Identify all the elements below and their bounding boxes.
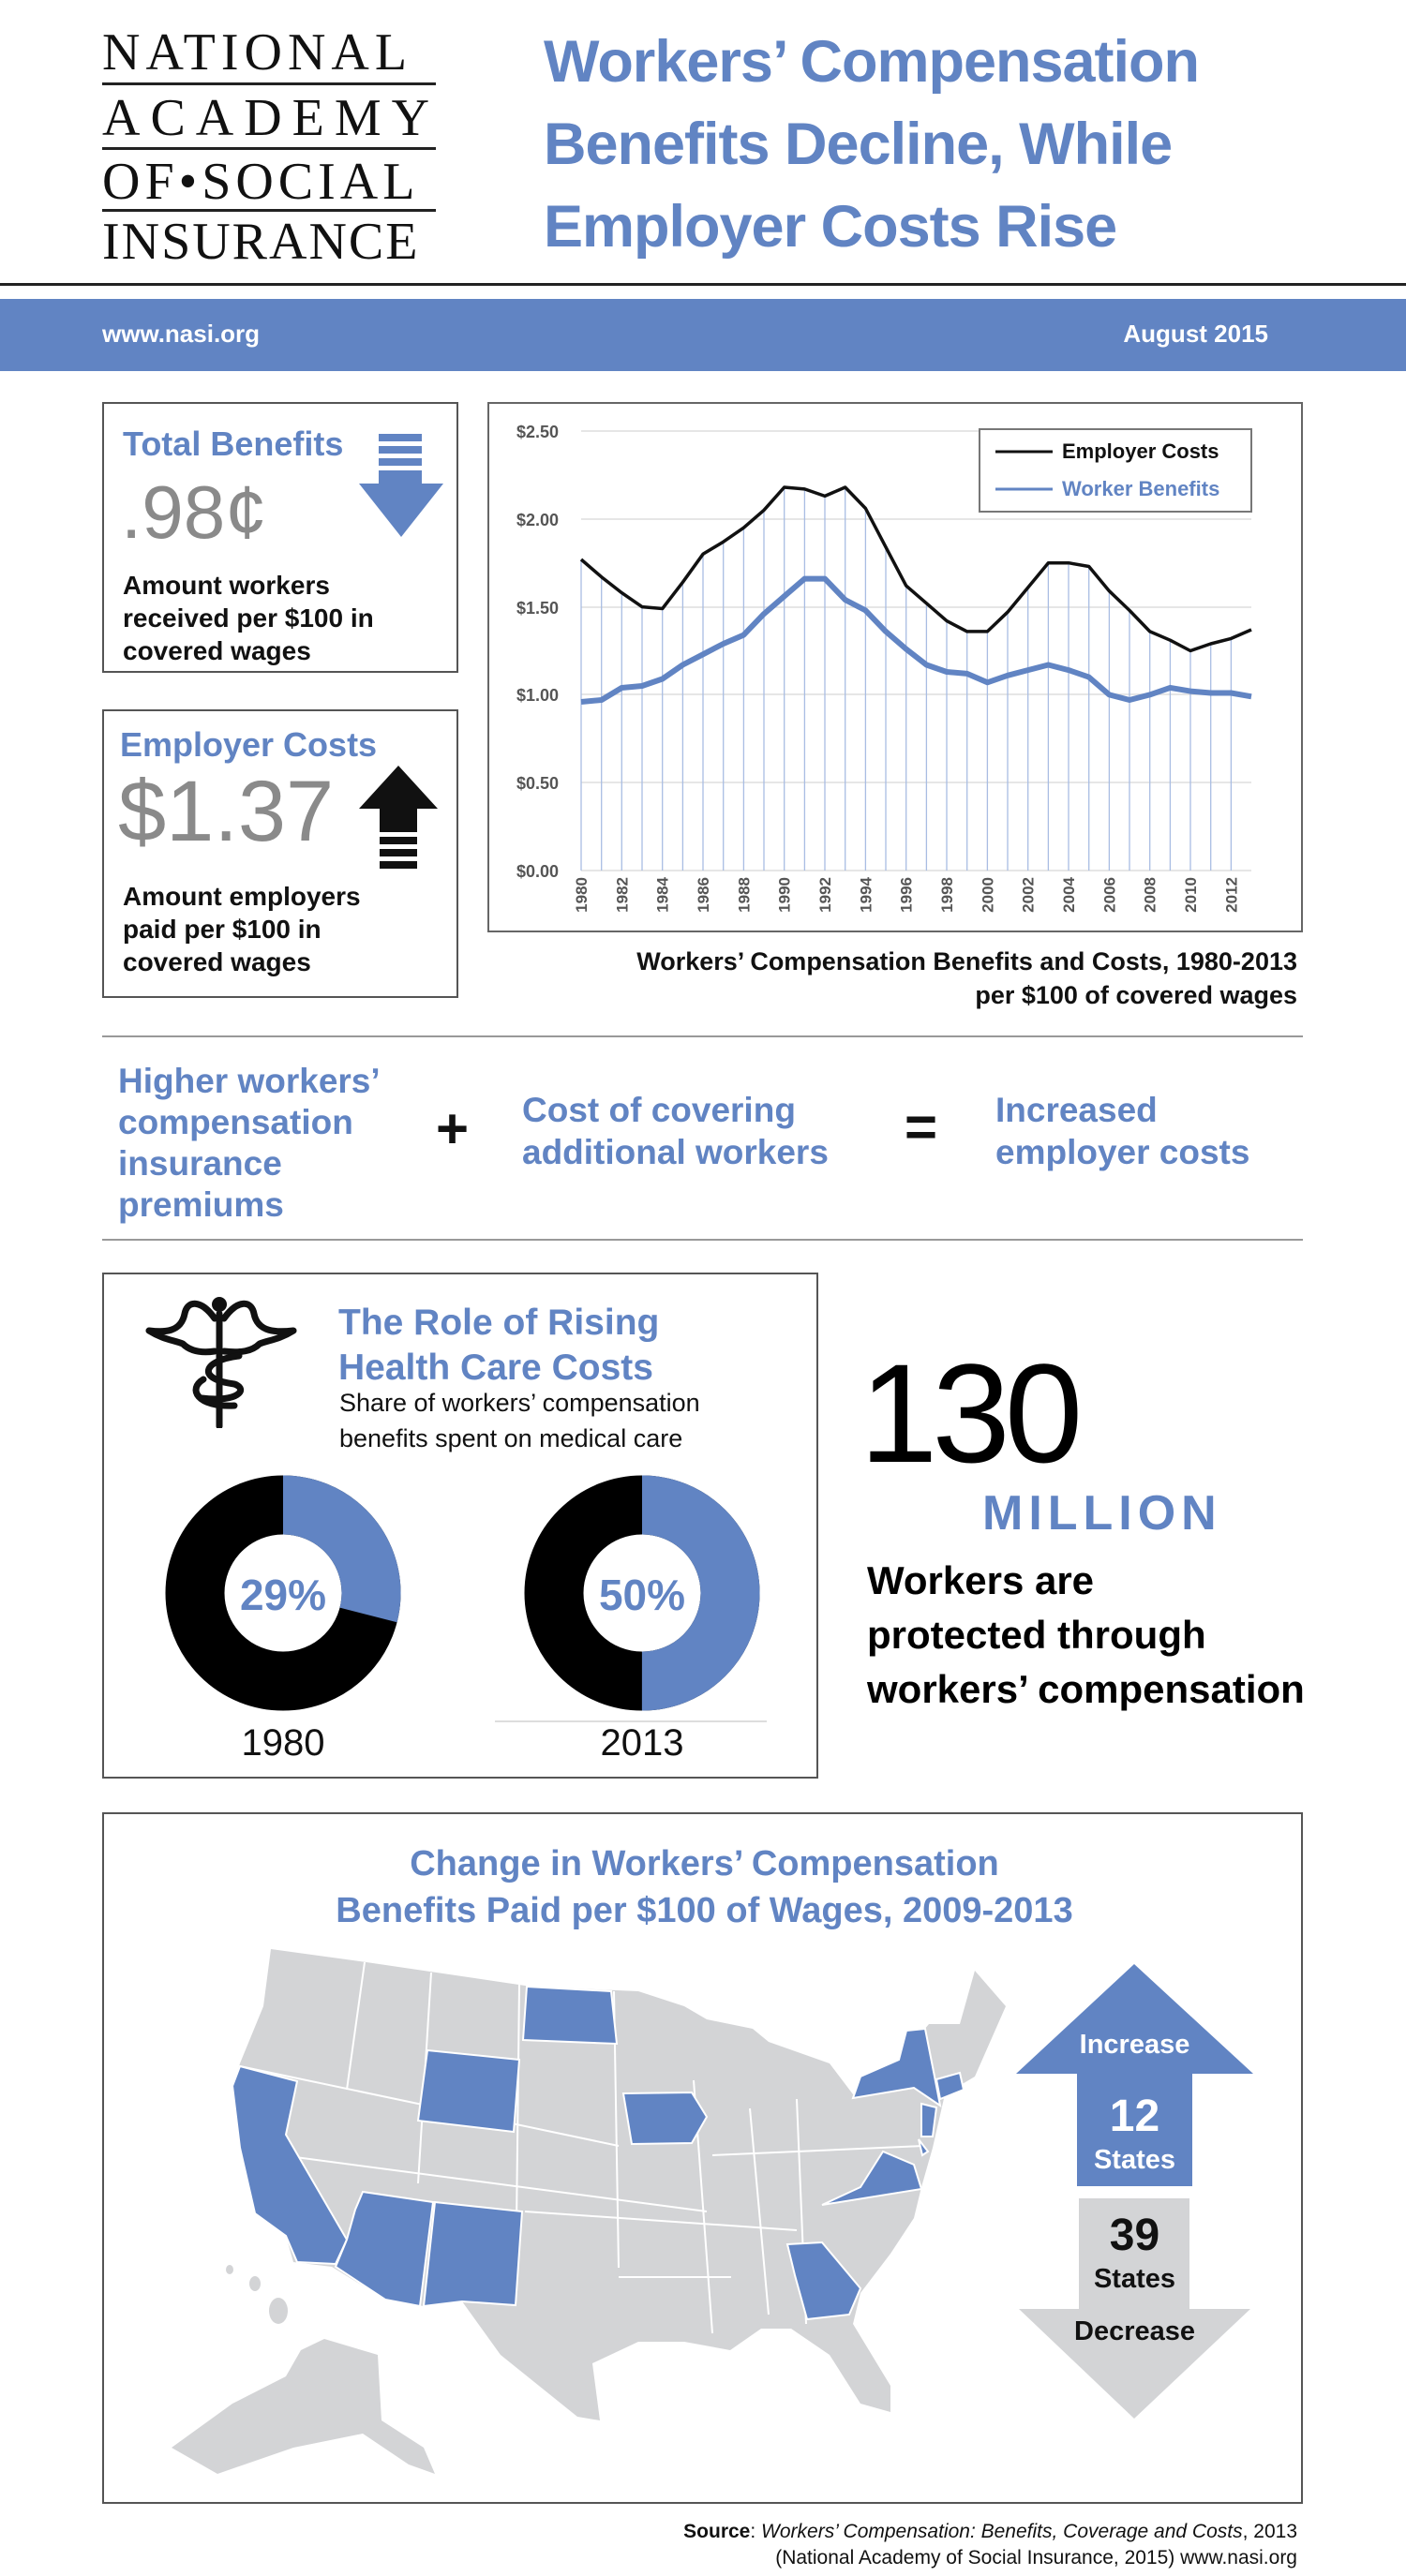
text: 1998 [938, 877, 956, 913]
text: workers protected: workers’ compensation [867, 1667, 1305, 1711]
text: description: paid per $100 in [123, 915, 322, 944]
header bar [0, 299, 1406, 371]
icon: caduceus [146, 1297, 296, 1428]
text: higher premiums: compensation [118, 1103, 353, 1141]
text: 2012 [1222, 877, 1240, 913]
alaska and hawaii [172, 2339, 435, 2474]
text: 1990 [776, 877, 794, 913]
logo: INSURANCE [102, 213, 419, 271]
title: Employer Costs Rise [544, 194, 1116, 260]
text: description [123, 882, 361, 976]
text: subtitle: benefits spent on medical care [339, 1424, 682, 1452]
stat: .98 cents: .98¢ [121, 470, 267, 554]
map: US states [172, 1949, 1006, 2474]
heading: map title: Change in Workers’ Compensation [410, 1844, 999, 1884]
heading: rising health care costs: Health Care Costs [338, 1348, 653, 1388]
text: higher premiums: Higher workers’ [118, 1062, 381, 1100]
heading: total benefits: Total Benefits [123, 424, 343, 463]
chart caption: per $100 of covered wages [975, 981, 1297, 1009]
text: $1.00 [516, 686, 559, 705]
text: $0.50 [516, 774, 559, 793]
text: 2008 [1142, 877, 1159, 913]
text: 1992 [816, 877, 834, 913]
arrow: decrease 39 states: 39 [1110, 2211, 1159, 2260]
text: 2000 [979, 877, 996, 913]
stat: $1.37: $1.37 [118, 764, 334, 859]
text: workers protected: protected through [867, 1613, 1206, 1657]
chart caption [636, 947, 1297, 1009]
text: additional workers: additional workers [522, 1133, 829, 1171]
text: $1.50 [516, 599, 559, 618]
equation row [118, 1062, 1249, 1224]
panel: employer costs [102, 709, 458, 998]
donut chart 1980: 29% [240, 1571, 326, 1619]
arrow: decrease 39 states [1019, 2198, 1250, 2419]
donut chart 1980 [165, 1475, 401, 1711]
text: description: covered wages [123, 636, 311, 665]
heading: map title: Benefits Paid per $100 of Wages, 2009-2013 [336, 1891, 1073, 1930]
text: $2.50 [516, 423, 559, 441]
source note: Source: Workers’ Compensation: Benefits, Coverage and Costs, 2013 [683, 2521, 1297, 2542]
logo: ACADEMY [102, 89, 440, 147]
heading: rising health care costs [338, 1303, 659, 1388]
heading: employer costs: Employer Costs [120, 725, 377, 764]
line chart [487, 402, 1303, 932]
text: 2010 [1182, 877, 1200, 913]
text: higher premiums: insurance [118, 1144, 282, 1183]
text: workers protected: Workers are [867, 1558, 1094, 1602]
title: Benefits Decline, While [544, 112, 1172, 177]
label 1980: 1980 [242, 1722, 324, 1764]
arrow: increase 12 states [1016, 1964, 1253, 2186]
source note [683, 2521, 1297, 2569]
arrow: increase 12 states: 12 [1110, 2092, 1159, 2141]
header bar: www.nasi.org [102, 320, 260, 348]
text: 1996 [898, 877, 916, 913]
arrow: increase 12 states: States [1094, 2145, 1175, 2175]
panel: state map [102, 1812, 1303, 2504]
title [544, 29, 1199, 260]
text: additional workers: Cost of covering [522, 1091, 796, 1129]
panel: health care costs [102, 1273, 818, 1779]
text: additional workers [522, 1091, 829, 1171]
text: $2.00 [516, 511, 559, 529]
text: increased employer costs [995, 1091, 1249, 1171]
stat: 130 million: 130 [860, 1334, 1077, 1492]
arrow: decrease 39 states: States [1094, 2264, 1175, 2294]
text: increased employer costs: Increased [995, 1091, 1158, 1129]
donut chart 2013 [525, 1475, 759, 1711]
stat: 130 million: MILLION [982, 1486, 1222, 1541]
arrow: increase 12 states: Increase [1080, 2030, 1189, 2060]
text: 1988 [735, 877, 753, 913]
symbol: plus: + [436, 1097, 469, 1160]
logo: OF•SOCIAL [102, 153, 419, 211]
text: Employer Costs [1062, 439, 1219, 463]
text: 1984 [654, 876, 672, 913]
text: 1994 [857, 876, 875, 913]
symbol: equals: = [905, 1095, 937, 1158]
title: Workers’ Compensation [544, 29, 1199, 95]
text: subtitle: Share of workers’ compensation [339, 1389, 700, 1417]
panel: total benefits [102, 402, 458, 673]
icon: down arrow [359, 434, 443, 537]
arrow: decrease 39 states: Decrease [1074, 2316, 1195, 2346]
chart caption: Workers’ Compensation Benefits and Costs, 1980-2013 [636, 947, 1297, 975]
text: workers protected [866, 1558, 1305, 1711]
text: 2004 [1060, 876, 1078, 913]
logo: NATIONAL [102, 23, 412, 82]
icon: up arrow [359, 766, 438, 869]
text: description: covered wages [123, 947, 311, 976]
text: description [123, 571, 374, 665]
text: 1986 [695, 877, 712, 913]
text: Worker Benefits [1062, 477, 1219, 500]
header bar: August 2015 [1123, 320, 1268, 348]
label 2013: 2013 [600, 1722, 683, 1764]
heading: map title [336, 1844, 1073, 1930]
source note: (National Academy of Social Insurance, 2015) www.nasi.org [775, 2547, 1297, 2569]
text: description: Amount employers [123, 882, 361, 911]
text: 2006 [1100, 877, 1118, 913]
text: higher premiums: premiums [118, 1185, 284, 1224]
text: 1982 [613, 877, 631, 913]
donut chart 2013: 50% [599, 1571, 685, 1619]
stat: 130 million [860, 1334, 1305, 1711]
text: 2002 [1020, 877, 1038, 913]
text: 1980 [573, 877, 591, 913]
text: description: received per $100 in [123, 603, 374, 633]
text: higher premiums [118, 1062, 381, 1224]
text: $0.00 [516, 862, 559, 881]
text: description: Amount workers [123, 571, 330, 600]
text: increased employer costs: employer costs [995, 1133, 1249, 1171]
heading: rising health care costs: The Role of Rising [338, 1303, 659, 1343]
text: subtitle [339, 1389, 700, 1452]
logo [102, 23, 440, 271]
